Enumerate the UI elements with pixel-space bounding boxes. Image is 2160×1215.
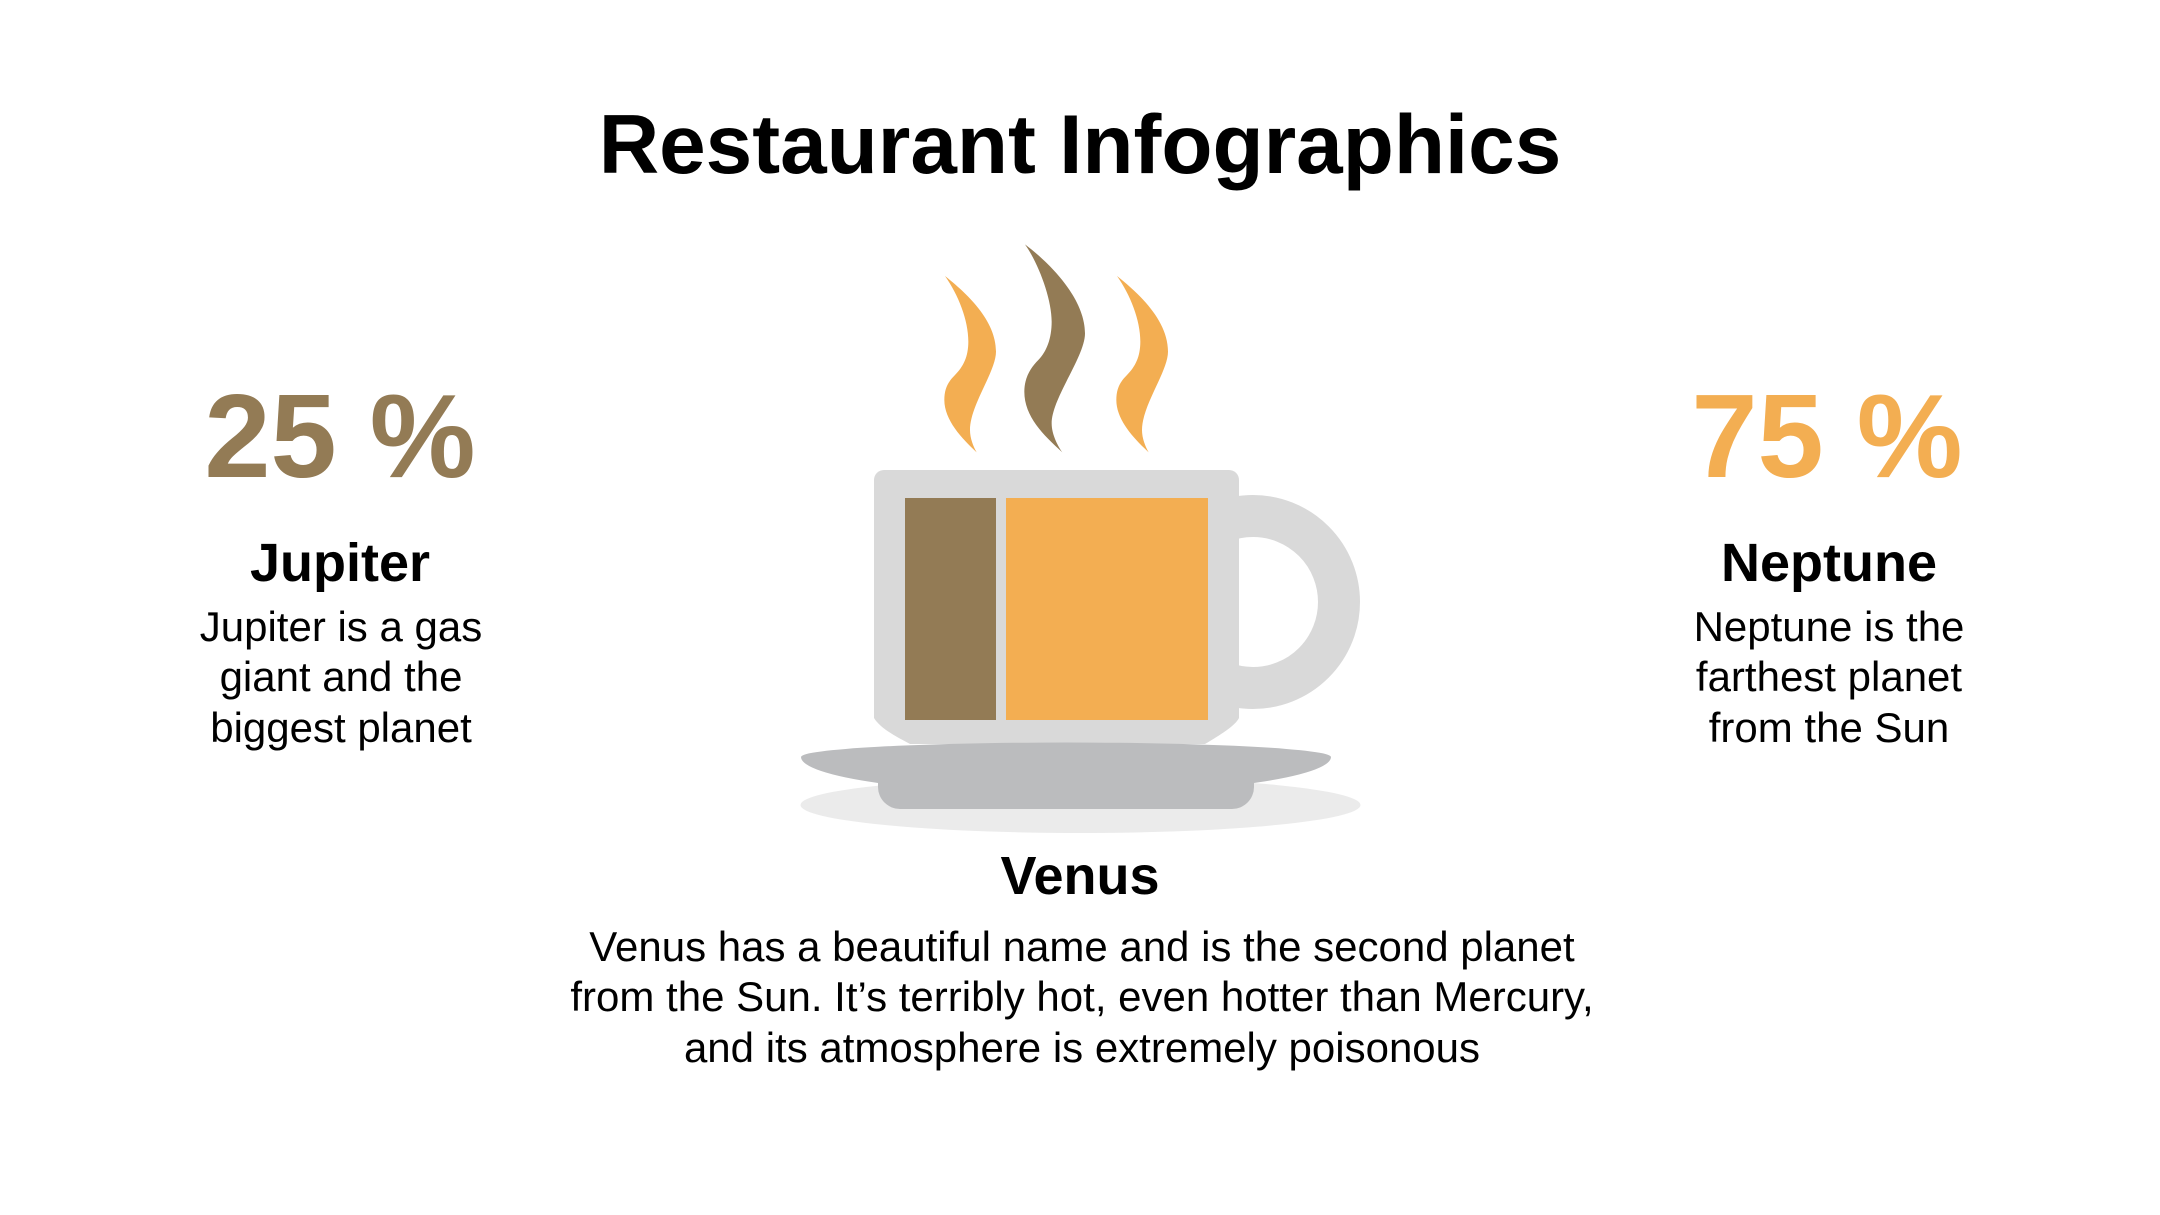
left stat: 25 %: 25 % <box>204 370 476 503</box>
steam left <box>944 276 996 452</box>
bottom text <box>570 923 1594 1071</box>
saucer <box>801 742 1331 809</box>
left text <box>200 603 482 751</box>
title: Restaurant Infographics <box>599 97 1561 191</box>
right text <box>1694 603 1964 751</box>
right heading: Neptune: Neptune <box>1721 533 1937 593</box>
cup body <box>874 470 1239 744</box>
right text: from the Sun <box>1709 704 1949 751</box>
bottom heading: Venus: Venus <box>1000 846 1160 906</box>
right stat: 75 %: 75 % <box>1691 370 1963 503</box>
liquid: 25% brown <box>905 498 996 720</box>
left text: giant and the <box>220 653 462 700</box>
bottom text: and its atmosphere is extremely poisonous <box>684 1024 1480 1071</box>
left heading: Jupiter: Jupiter <box>250 533 430 593</box>
steam right <box>1116 276 1168 452</box>
steam centre <box>1024 244 1085 452</box>
liquid: 75% orange <box>1006 498 1208 720</box>
left text: Jupiter is a gas <box>200 603 482 650</box>
right text: Neptune is the <box>1694 603 1964 650</box>
bottom text: Venus has a beautiful name and is the second planet <box>589 923 1575 970</box>
right text: farthest planet <box>1696 653 1962 700</box>
saucer shadow <box>800 777 1360 833</box>
left text: biggest planet <box>210 704 472 751</box>
cup handle <box>1167 516 1339 688</box>
bottom text: from the Sun. It’s terribly hot, even hotter than Mercury, <box>570 973 1594 1020</box>
